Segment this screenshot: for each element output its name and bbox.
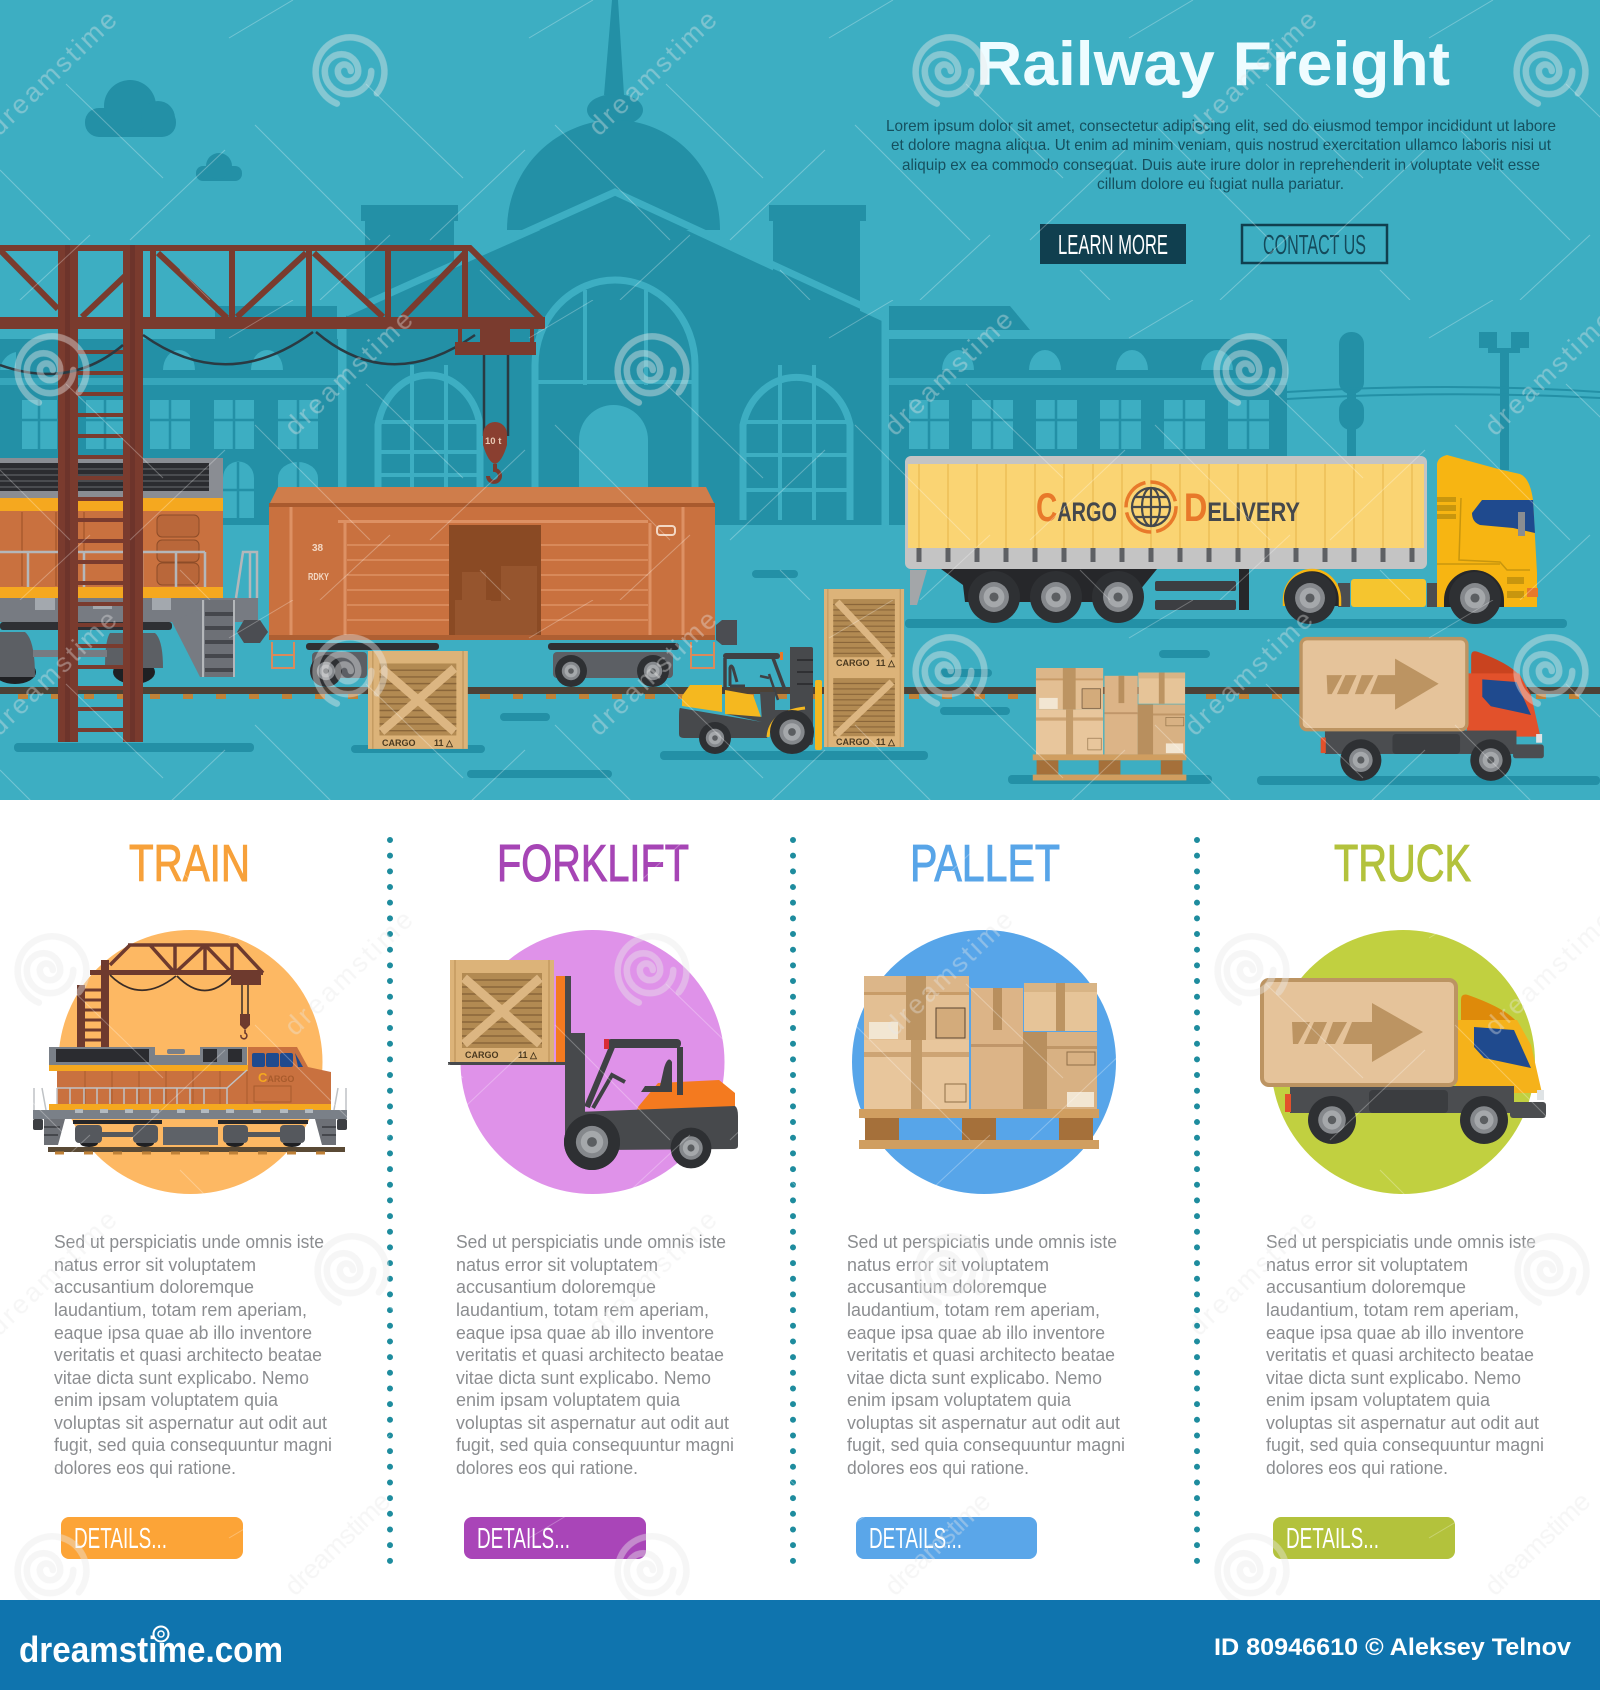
body text: accusantium doloremque (54, 1277, 254, 1297)
watermark text: dreamstime (1178, 604, 1319, 741)
body text: natus error sit voluptatem (456, 1255, 658, 1275)
illustration: hero pallet with boxes (1033, 668, 1186, 780)
body text: veritatis et quasi architecto beatae (54, 1345, 322, 1365)
icon: card locomotive (33, 1047, 347, 1153)
illustration: hero boxcar (269, 487, 737, 687)
icon: train circle (58, 930, 322, 1194)
footer bar (0, 1600, 1600, 1690)
button: details: DETAILS... (1286, 1523, 1379, 1555)
body text: fugit, sed quia consequuntur magni (1266, 1435, 1544, 1455)
body text: vitae dicta sunt explicabo. Nemo (456, 1368, 711, 1388)
panel: pallet (847, 835, 1125, 1559)
body text: dolores eos qui ratione. (54, 1458, 236, 1478)
illustration: stacked crates (824, 589, 904, 747)
body text: dolores eos qui ratione. (1266, 1458, 1448, 1478)
intro paragraph: et dolore magna aliqua. Ut enim ad minim veniam, quis nostrud exercitation ullamco laboris nisi ut (891, 137, 1552, 154)
ground shadow bars (14, 570, 1600, 785)
railway track (0, 687, 1600, 696)
illustration: semi truck with cargo trailer: DELIVERY (1184, 486, 1300, 530)
panel: white cards area (0, 800, 1600, 1600)
body text: voluptas sit aspernatur aut odit aut (54, 1413, 327, 1433)
body text: accusantium doloremque (456, 1277, 656, 1297)
panel: forklift (448, 835, 738, 1559)
illustration: hero boxcar: 38 (312, 543, 324, 554)
body text: vitae dicta sunt explicabo. Nemo (1266, 1368, 1521, 1388)
button: details (856, 1517, 1037, 1559)
body text: natus error sit voluptatem (847, 1255, 1049, 1275)
body text (54, 1232, 332, 1478)
footer logo: dreamstime.com (19, 1629, 283, 1670)
intro paragraph: Lorem ipsum dolor sit amet, consectetur adipiscing elit, sed do eiusmod tempor incididunt ut labore (886, 118, 1556, 135)
watermark text: dreamstime (582, 1204, 723, 1341)
body text: laudantium, totam rem aperiam, (847, 1300, 1100, 1320)
button: learn more (1040, 224, 1186, 264)
tractor cab (1437, 455, 1538, 607)
illustration: small delivery truck (1301, 639, 1544, 781)
icon: card crane (77, 945, 263, 1048)
body text (1266, 1232, 1544, 1478)
dotted dividers (390, 840, 1197, 1566)
body text: veritatis et quasi architecto beatae (847, 1345, 1115, 1365)
illustration: hero locomotive (0, 458, 268, 684)
illustration: hero forklift (679, 647, 822, 754)
footer image id: ID 80946610 © Aleksey Telnov (1214, 1634, 1572, 1661)
body text: dolores eos qui ratione. (847, 1458, 1029, 1478)
body text: Sed ut perspiciatis unde omnis iste (847, 1232, 1117, 1252)
illustration: stacked crates: CARGO (836, 737, 870, 747)
body text: natus error sit voluptatem (1266, 1255, 1468, 1275)
icon: card crate: 11 △ (518, 1050, 538, 1060)
icon: card forklift (448, 976, 738, 1170)
watermark text: dreamstime (1182, 4, 1323, 141)
panel: truck (1262, 835, 1546, 1559)
body text: fugit, sed quia consequuntur magni (54, 1435, 332, 1455)
watermark text: dreamstime (1478, 1486, 1596, 1601)
body text: laudantium, totam rem aperiam, (456, 1300, 709, 1320)
intro paragraph (886, 118, 1556, 193)
icon: forklift circle (460, 930, 724, 1194)
heading: pallet: PALLET (910, 835, 1060, 893)
button: details: DETAILS... (477, 1523, 570, 1555)
body text: enim ipsam voluptatem quia (456, 1390, 681, 1410)
illustration: signal, lamp post and wires (1287, 332, 1600, 470)
illustration: hero wooden crate (368, 651, 468, 749)
button: learn more: LEARN MORE (1058, 229, 1168, 260)
button: contact us: CONTACT US (1263, 229, 1366, 260)
watermark text: dreamstime (582, 4, 723, 141)
button: details (464, 1517, 646, 1559)
button: contact us (1242, 225, 1387, 263)
icon: card truck (1262, 980, 1546, 1144)
body text: laudantium, totam rem aperiam, (54, 1300, 307, 1320)
body text: vitae dicta sunt explicabo. Nemo (54, 1368, 309, 1388)
button: details: DETAILS... (74, 1523, 167, 1555)
heading: train: TRAIN (129, 835, 250, 893)
icon: small cloud (196, 153, 242, 181)
illustration: hero wooden crate: CARGO (382, 738, 416, 748)
body text (456, 1232, 734, 1478)
button: details: DETAILS... (869, 1523, 962, 1555)
watermark text: dreamstime (278, 1486, 396, 1601)
body text: eaque ipsa quae ab illo inventore (54, 1323, 312, 1343)
body text: fugit, sed quia consequuntur magni (847, 1435, 1125, 1455)
intro paragraph: aliquip ex ea commodo consequat. Duis aute irure dolor in reprehenderit in voluptate velit esse (902, 157, 1540, 174)
body text: enim ipsam voluptatem quia (54, 1390, 279, 1410)
illustration: stacked crates: 11 △ (876, 737, 896, 747)
title: Railway Freight (976, 30, 1450, 99)
watermark text: dreamstime (278, 904, 419, 1041)
body text: Sed ut perspiciatis unde omnis iste (54, 1232, 324, 1252)
body text: veritatis et quasi architecto beatae (456, 1345, 724, 1365)
body text: laudantium, totam rem aperiam, (1266, 1300, 1519, 1320)
body text: accusantium doloremque (847, 1277, 1047, 1297)
body text: enim ipsam voluptatem quia (1266, 1390, 1491, 1410)
body text: Sed ut perspiciatis unde omnis iste (1266, 1232, 1536, 1252)
illustration: stacked crates: 11 △ (876, 658, 896, 668)
icon: card crate (450, 960, 554, 1062)
illustration: hero wooden crate: 11 △ (434, 738, 454, 748)
body text: vitae dicta sunt explicabo. Nemo (847, 1368, 1102, 1388)
watermark text: dreamstime (878, 904, 1019, 1041)
intro paragraph: cillum dolore eu fugiat nulla pariatur. (1097, 176, 1344, 193)
illustration: gantry crane (0, 245, 545, 742)
icon: card locomotive: CARGO (258, 1070, 294, 1085)
body text: voluptas sit aspernatur aut odit aut (847, 1413, 1120, 1433)
icon: truck circle (1271, 930, 1535, 1194)
watermark text: dreamstime (278, 304, 419, 441)
body text: eaque ipsa quae ab illo inventore (456, 1323, 714, 1343)
heading: truck: TRUCK (1334, 835, 1471, 893)
body text: enim ipsam voluptatem quia (847, 1390, 1072, 1410)
icon: large cloud (85, 80, 176, 137)
icon: card crate: CARGO (465, 1050, 498, 1060)
icon: card pallet with boxes (859, 976, 1099, 1149)
illustration: stacked crates: CARGO (836, 658, 870, 668)
watermark text: dreamstime (582, 604, 723, 741)
body text: Sed ut perspiciatis unde omnis iste (456, 1232, 726, 1252)
body text: voluptas sit aspernatur aut odit aut (1266, 1413, 1539, 1433)
watermark text: dreamstime (878, 1486, 996, 1601)
watermark text: dreamstime (1182, 1204, 1323, 1341)
body text: voluptas sit aspernatur aut odit aut (456, 1413, 729, 1433)
illustration: semi truck with cargo trailer (905, 455, 1538, 624)
body text: dolores eos qui ratione. (456, 1458, 638, 1478)
icon: pallet circle (852, 930, 1116, 1194)
panel: hero background (0, 0, 1600, 800)
heading: forklift: FORKLIFT (497, 835, 689, 893)
illustration: railway station silhouette (0, 0, 1287, 525)
body text (847, 1232, 1125, 1478)
illustration: hero boxcar: RDKY (308, 572, 329, 583)
panel: train (33, 835, 347, 1559)
body text: natus error sit voluptatem (54, 1255, 256, 1275)
button: details (61, 1517, 243, 1559)
body text: accusantium doloremque (1266, 1277, 1466, 1297)
body text: eaque ipsa quae ab illo inventore (847, 1323, 1105, 1343)
body text: veritatis et quasi architecto beatae (1266, 1345, 1534, 1365)
illustration: semi truck with cargo trailer: CARGO (1036, 486, 1117, 530)
body text: fugit, sed quia consequuntur magni (456, 1435, 734, 1455)
button: details (1273, 1517, 1455, 1559)
body text: eaque ipsa quae ab illo inventore (1266, 1323, 1524, 1343)
illustration: gantry crane: 10 t (485, 436, 502, 447)
watermark text: dreamstime (878, 304, 1019, 441)
